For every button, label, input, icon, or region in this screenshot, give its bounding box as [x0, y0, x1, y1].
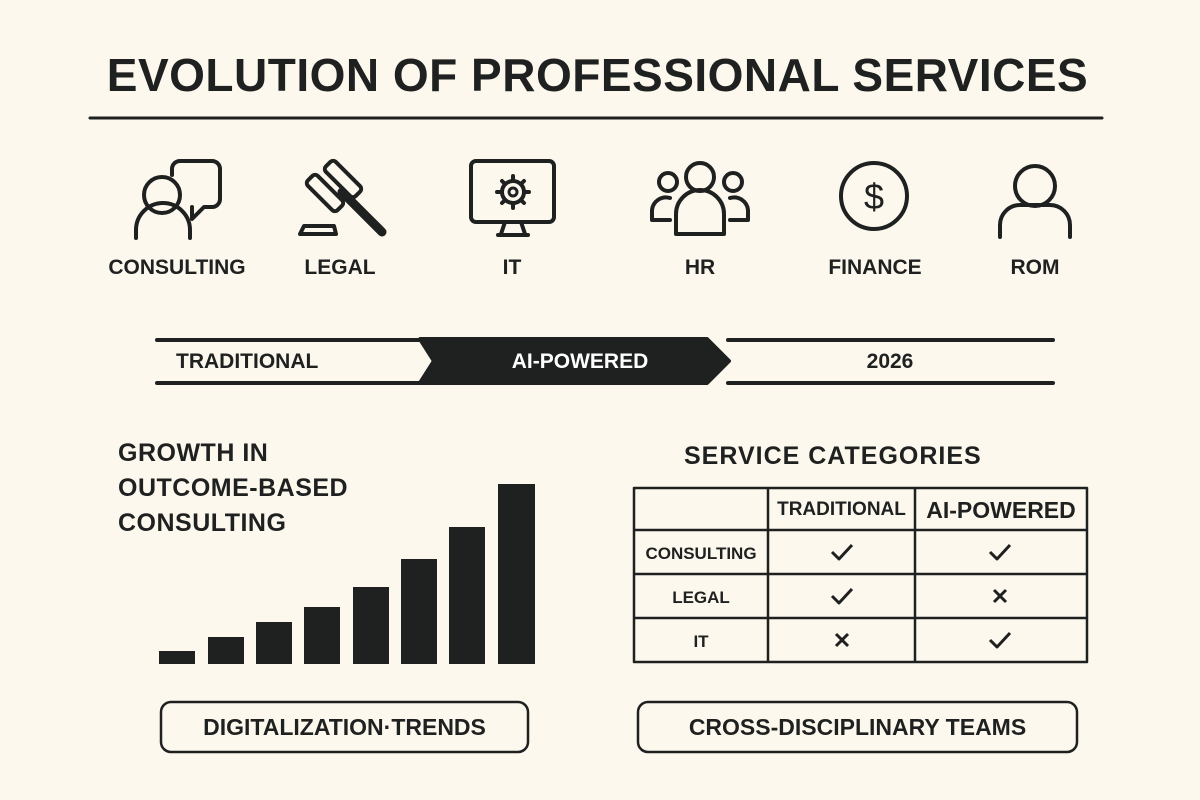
table title: SERVICE CATEGORIES [684, 442, 982, 470]
icon: HR group [652, 163, 748, 234]
icon labels: ROM [1010, 256, 1060, 279]
icon labels: FINANCE [828, 256, 922, 279]
box: cross-disciplinary teams: CROSS-DISCIPLINARY TEAMS [689, 714, 1026, 740]
timeline labels: TRADITIONAL [176, 350, 318, 373]
table text: TRADITIONAL [777, 499, 906, 520]
icon labels: IT [503, 256, 521, 279]
timeline [157, 339, 1053, 383]
icon: consulting [136, 161, 220, 238]
timeline labels: AI-POWERED [512, 350, 648, 373]
table text [645, 497, 1076, 651]
chart title: OUTCOME-BASED [118, 474, 348, 502]
chart title: GROWTH IN [118, 439, 268, 467]
timeline labels: 2026 [867, 350, 913, 373]
icon: finance [841, 163, 907, 229]
icon labels: LEGAL [304, 256, 376, 279]
chart title [118, 439, 348, 537]
timeline labels [176, 350, 913, 373]
bar chart [159, 484, 535, 664]
table text: CONSULTING [645, 544, 757, 563]
icon: person [1000, 166, 1070, 237]
icon labels: CONSULTING [108, 256, 246, 279]
icon: finance: $ [864, 176, 884, 217]
icon: legal gavel [300, 159, 382, 234]
icon: IT monitor [471, 161, 554, 235]
icon labels [108, 256, 1060, 279]
table text: IT [693, 632, 709, 651]
boxes [161, 702, 528, 752]
table grid [634, 488, 1087, 662]
title: EVOLUTION OF PROFESSIONAL SERVICES [107, 49, 1088, 101]
chart title: CONSULTING [118, 509, 286, 537]
table text: AI-POWERED [926, 497, 1076, 523]
icon labels: HR [685, 256, 715, 279]
table text: LEGAL [672, 588, 730, 607]
box: digitalization trends: DIGITALIZATION·TRENDS [203, 714, 486, 740]
